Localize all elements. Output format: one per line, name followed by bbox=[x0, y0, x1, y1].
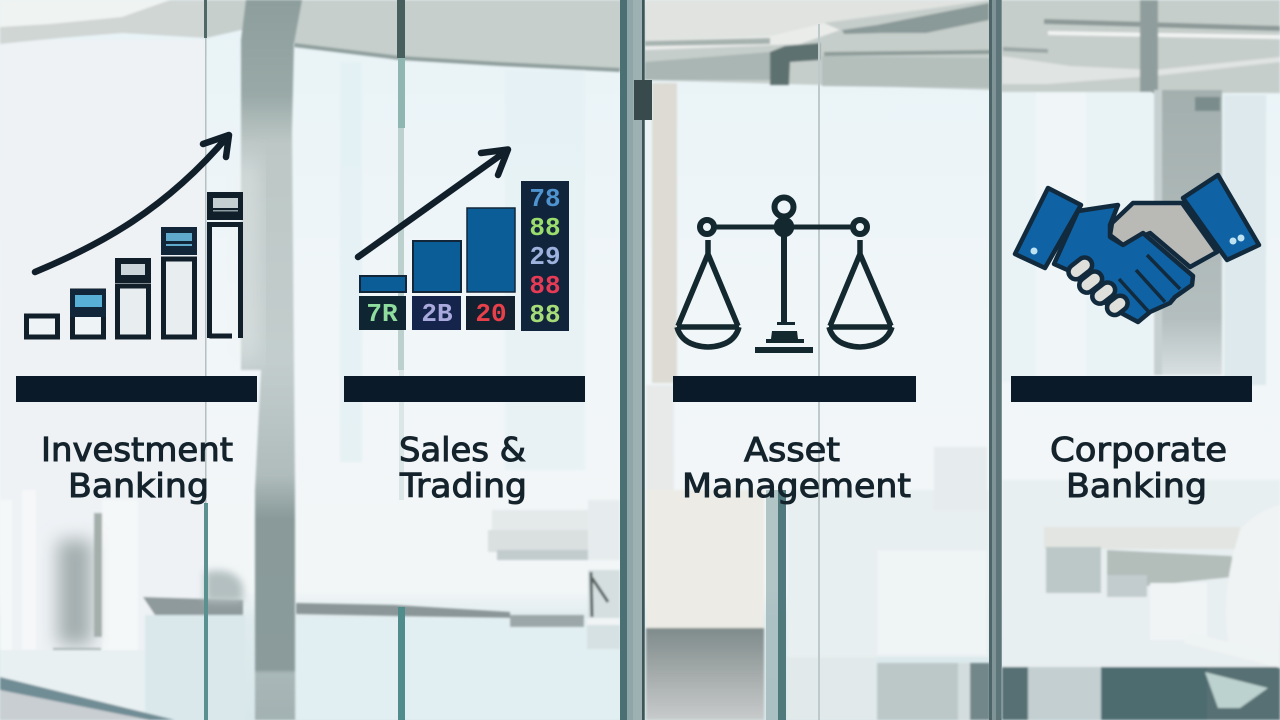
background desk centre-left bbox=[492, 510, 590, 532]
icon: trading bars with tickers: 88 bbox=[529, 213, 561, 243]
grey hand bbox=[1110, 203, 1217, 267]
heading: Sales & Trading: Sales & bbox=[399, 430, 526, 469]
floor lower tone bbox=[145, 615, 245, 720]
panel: Asset Management bbox=[673, 198, 916, 505]
divider bar bbox=[1011, 376, 1252, 402]
heading: Asset Management: Management bbox=[682, 466, 911, 505]
heading: Asset Management: Asset bbox=[744, 430, 840, 469]
icon: balance scale bbox=[677, 198, 892, 353]
window band right of door bbox=[1002, 92, 1152, 382]
icon: trading bars with tickers: 88 bbox=[529, 300, 561, 330]
panel: Investment Banking bbox=[16, 135, 257, 505]
icon: trading bars with tickers: 78 bbox=[529, 184, 561, 214]
peach panel behind asset management bbox=[652, 83, 677, 383]
heading: Corporate Banking bbox=[1050, 430, 1227, 505]
heading: Sales & Trading bbox=[399, 430, 527, 505]
ceiling between pillar and door bbox=[206, 0, 622, 70]
right pan bbox=[829, 240, 892, 347]
heading: Corporate Banking: Corporate bbox=[1050, 430, 1227, 469]
left cuff bbox=[1015, 188, 1081, 268]
pale curtains bbox=[340, 62, 362, 462]
glass partition frames bbox=[204, 0, 1002, 720]
heading: Investment Banking: Investment bbox=[41, 430, 233, 469]
icon: rising bar chart with arrow bbox=[26, 135, 243, 338]
right cuff bbox=[1183, 175, 1259, 260]
counter lines bbox=[143, 597, 243, 615]
door handle bbox=[634, 80, 652, 120]
icon: trading bars with tickers: 7R bbox=[366, 299, 398, 329]
heading: Sales & Trading: Trading bbox=[399, 466, 527, 505]
divider bar bbox=[344, 376, 585, 402]
panel: Corporate Banking bbox=[1011, 175, 1259, 505]
heading: Corporate Banking: Banking bbox=[1066, 466, 1207, 505]
fingers bbox=[1065, 254, 1131, 318]
icon: trading bars with tickers: 29 bbox=[529, 242, 561, 272]
icon: trading bars with tickers: 20 bbox=[475, 299, 507, 329]
blue hand bbox=[1054, 205, 1193, 322]
centre-right ceiling bbox=[640, 0, 1280, 93]
left cabinet shadow bbox=[58, 540, 92, 645]
finger lines bbox=[1119, 255, 1180, 311]
icon: trading bars with tickers: 2B bbox=[421, 299, 453, 329]
heading: Asset Management bbox=[682, 430, 911, 505]
icon: trading bars with tickers bbox=[358, 150, 569, 331]
left white wall and ceiling bbox=[0, 40, 206, 720]
bottom left floor strip bbox=[0, 690, 175, 720]
heading: Investment Banking: Banking bbox=[68, 466, 209, 505]
centre white cabinet bbox=[787, 490, 989, 657]
icon: handshake bbox=[1015, 175, 1259, 322]
dark L bracket bbox=[770, 43, 820, 85]
desk and chair at right bbox=[1002, 480, 1280, 667]
icon: trading bars with tickers: 88 bbox=[529, 271, 561, 301]
divider bar bbox=[673, 376, 916, 402]
pillar bbox=[236, 0, 302, 720]
arrow bbox=[358, 150, 508, 257]
divider bar bbox=[16, 376, 257, 402]
panel: Sales & Trading bbox=[344, 150, 585, 505]
heading: Investment Banking bbox=[41, 430, 233, 505]
arrow bbox=[35, 135, 229, 272]
left pan bbox=[677, 240, 739, 347]
right column bbox=[1154, 90, 1222, 375]
